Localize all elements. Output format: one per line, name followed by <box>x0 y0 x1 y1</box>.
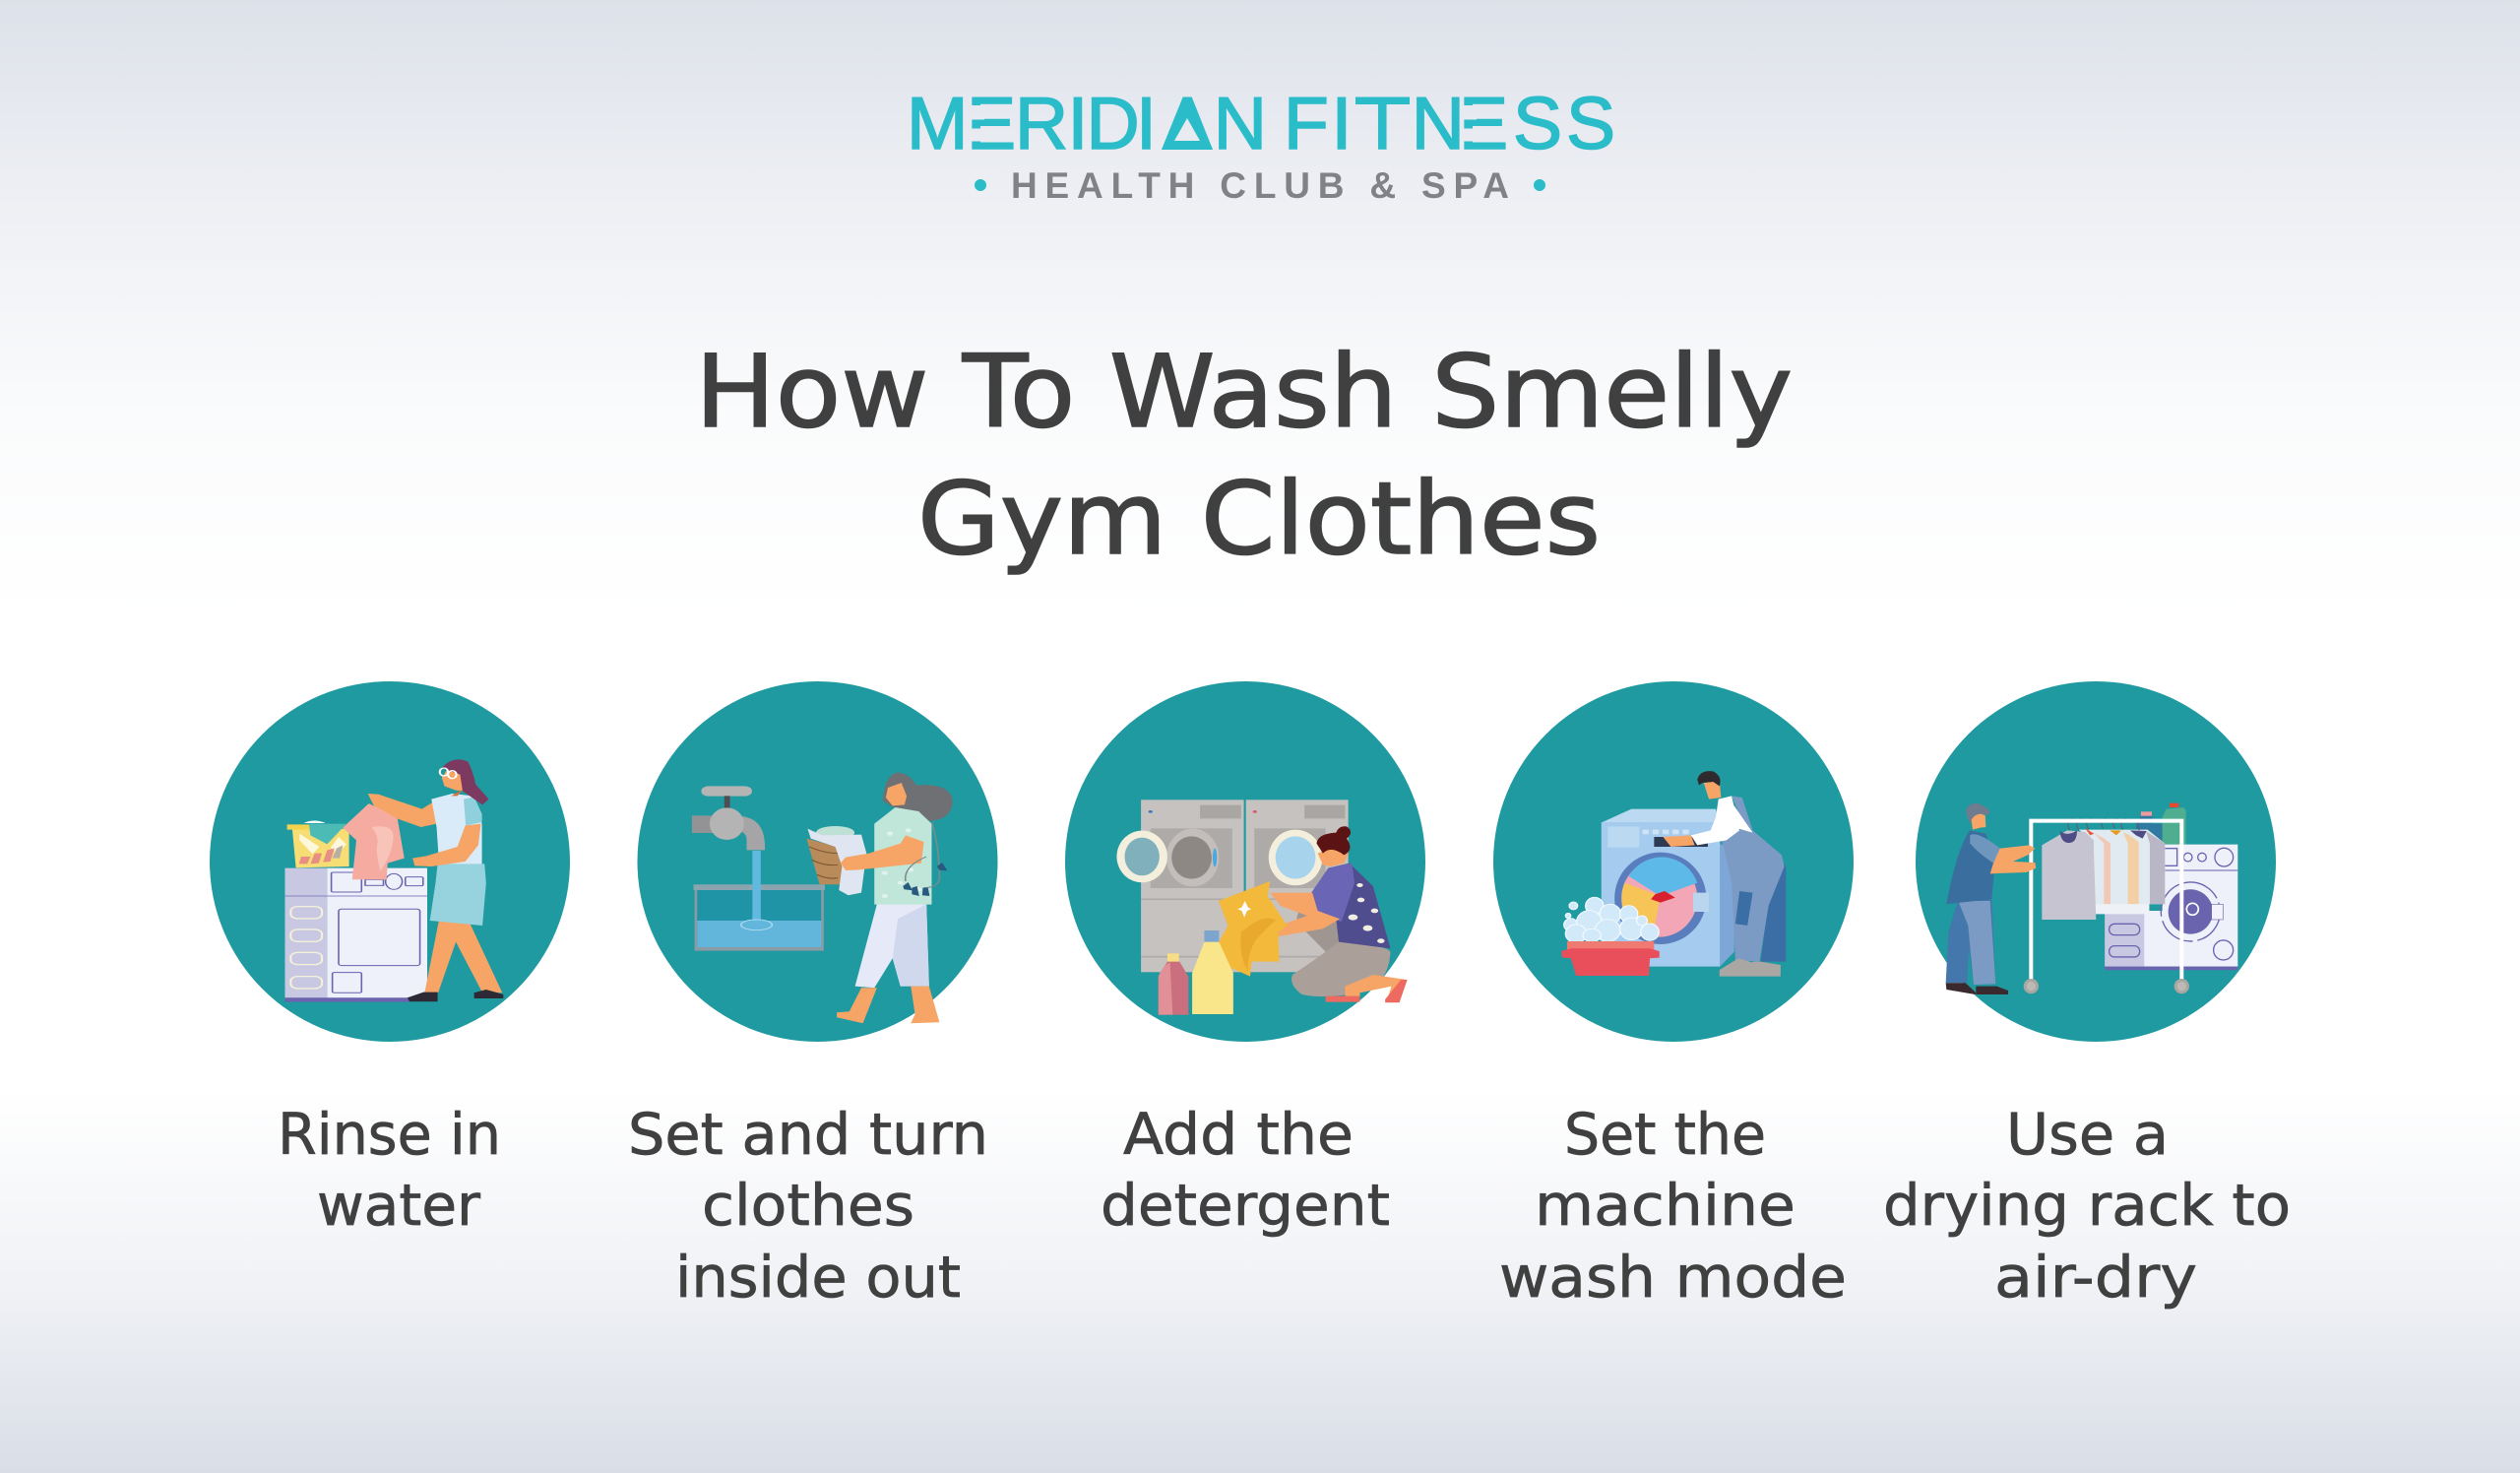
circle 3 <box>1065 681 1425 1042</box>
step 3 panel: add the detergent <box>1065 681 1425 1239</box>
step 2 panel: set and turn clothes inside out <box>628 681 998 1311</box>
logo <box>907 82 1615 206</box>
circle 1 <box>210 681 570 1042</box>
circle 4 <box>1493 681 1854 1042</box>
step 1 panel: rinse in water <box>210 681 570 1239</box>
label: add the detergent: Add the <box>1123 1101 1354 1168</box>
label: use a drying rack to air-dry: drying rack to <box>1883 1172 2291 1239</box>
label: set and turn clothes inside out: clothes <box>702 1172 914 1239</box>
label: set the machine wash mode: Set the <box>1564 1101 1766 1168</box>
logo wordmark: MERIDIAN FITNESS <box>907 82 1615 164</box>
step 4 panel: set the machine wash mode <box>1493 681 1854 1311</box>
label: rinse in water <box>278 1101 501 1239</box>
illustration: faucet, tub and woman with basket <box>692 772 953 1023</box>
circle 5 <box>1916 681 2276 1042</box>
circle 2 <box>638 681 998 1042</box>
title <box>695 334 1793 578</box>
step 5 panel: use a drying rack to air-dry <box>1883 681 2291 1311</box>
illustration: woman at washing machine <box>284 759 503 1002</box>
label: rinse in water: Rinse in <box>278 1101 501 1168</box>
label: set the machine wash mode: machine <box>1535 1172 1796 1239</box>
logo dot right <box>1534 179 1545 191</box>
label: set and turn clothes inside out: inside out <box>675 1244 961 1311</box>
illustration: woman loading washing machines with detergent <box>1116 800 1408 1015</box>
label: set the machine wash mode: wash mode <box>1499 1244 1847 1311</box>
logo dot left <box>975 179 986 191</box>
label: add the detergent: detergent <box>1101 1172 1390 1239</box>
label: use a drying rack to air-dry <box>1883 1101 2291 1311</box>
label: add the detergent <box>1101 1101 1390 1239</box>
label: use a drying rack to air-dry: Use a <box>2006 1101 2169 1168</box>
logo letter details <box>970 96 1477 150</box>
label: use a drying rack to air-dry: air-dry <box>1994 1244 2197 1311</box>
title: How To Wash Smelly <box>695 334 1793 451</box>
illustration: man operating washer with foam basin <box>1561 771 1786 977</box>
label: rinse in water: water <box>317 1172 480 1239</box>
label: set and turn clothes inside out: Set and turn <box>628 1101 988 1168</box>
label: set the machine wash mode <box>1499 1101 1847 1311</box>
illustration: man with clothes rack and washer <box>1946 803 2237 994</box>
logo tagline: HEALTH CLUB & SPA <box>1011 165 1509 206</box>
title: Gym Clothes <box>917 461 1601 578</box>
label: set and turn clothes inside out <box>628 1101 988 1311</box>
